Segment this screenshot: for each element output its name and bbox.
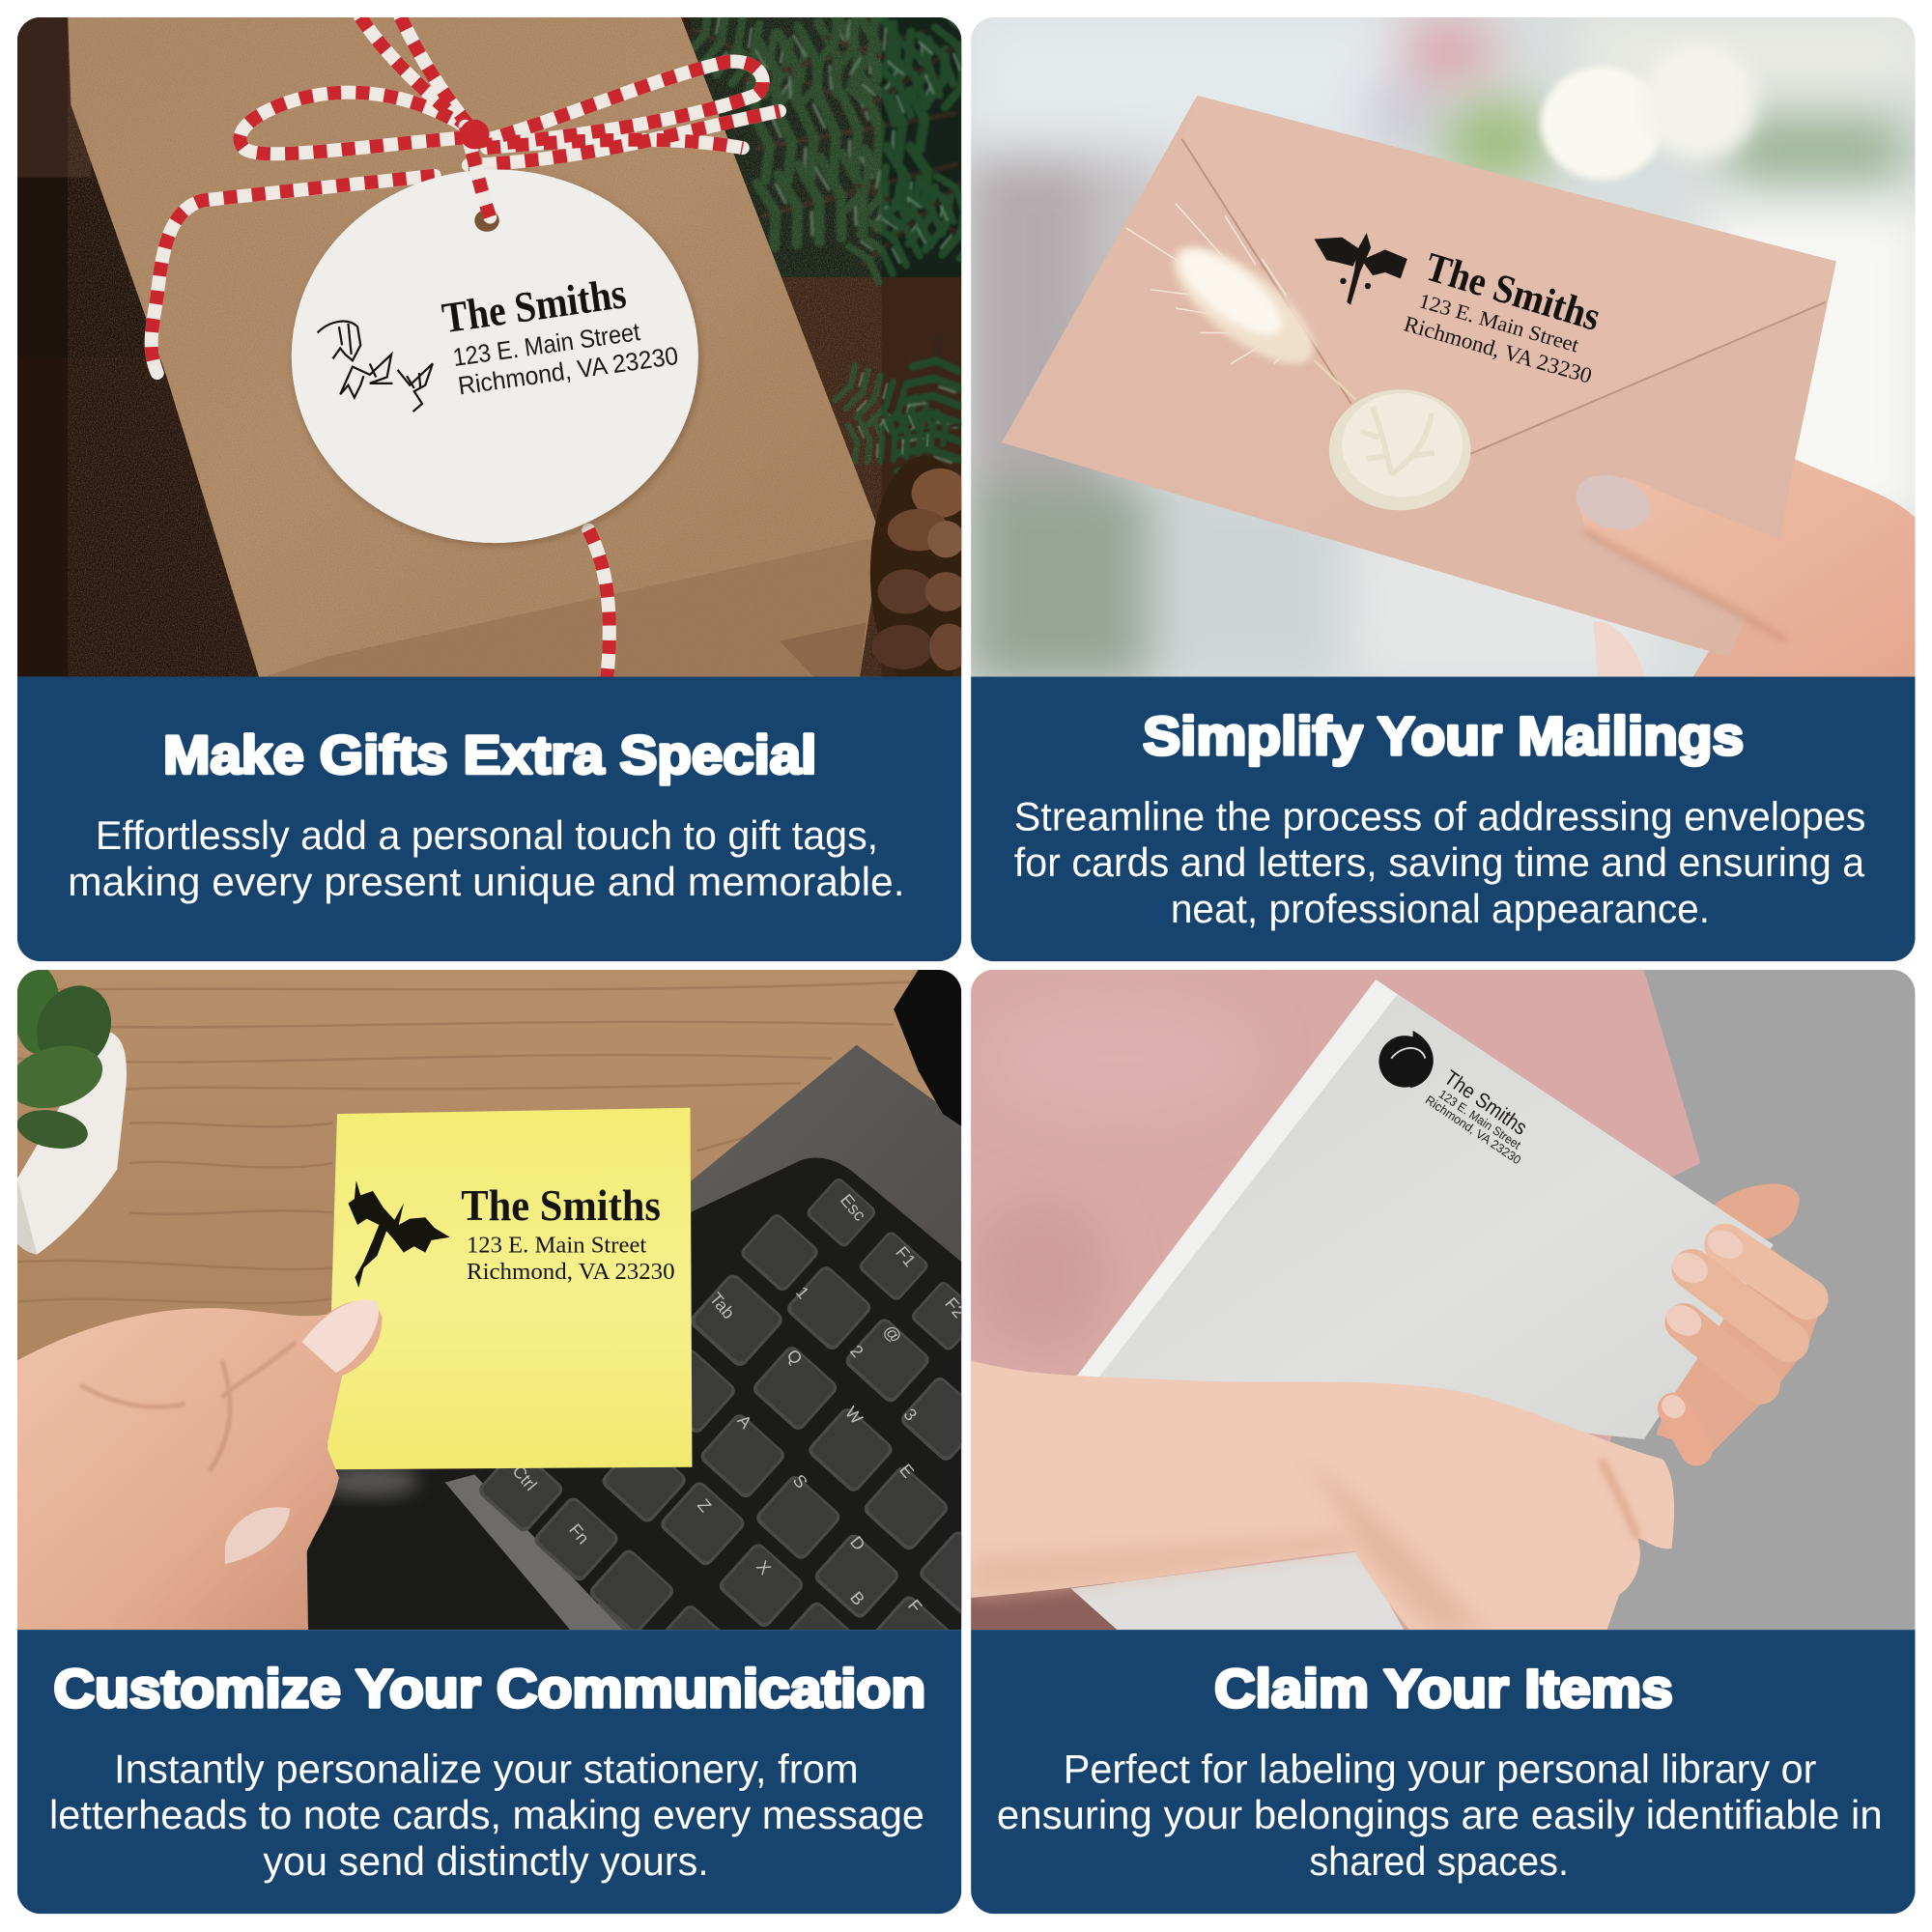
black object corner bbox=[894, 970, 961, 1126]
sticky note bbox=[327, 1108, 692, 1469]
box bbox=[68, 17, 881, 677]
caption: make gifts: Effortlessly add a personal touch to gift tags, bbox=[96, 812, 878, 858]
envelope bbox=[1002, 96, 1836, 657]
stamp dragon bbox=[1314, 233, 1407, 305]
envelope text: The Smiths bbox=[1420, 244, 1605, 340]
key labels: Esc bbox=[837, 1190, 869, 1225]
caption: claim: ensuring your belongings are easily identifiable in bbox=[997, 1792, 1883, 1837]
thumb bbox=[1577, 459, 1916, 677]
key labels bbox=[508, 1190, 969, 1616]
tag shadow bbox=[293, 173, 700, 546]
panel: make gifts extra special bbox=[17, 0, 1011, 961]
caption: claim: Claim Your Items bbox=[1214, 1659, 1673, 1719]
caption: make gifts: making every present unique and memorable. bbox=[68, 859, 905, 904]
photo: sticky note on laptop bbox=[17, 970, 962, 1631]
note text: Richmond, VA 23230 bbox=[467, 1259, 675, 1285]
caption: simplify: Simplify Your Mailings bbox=[1143, 706, 1744, 766]
caption: customize: Customize Your Communication bbox=[54, 1659, 925, 1719]
hand back bbox=[1693, 459, 1916, 677]
caption: customize: you send distinctly yours. bbox=[263, 1838, 709, 1884]
key labels: Fn bbox=[565, 1520, 593, 1548]
note text: 123 E. Main Street bbox=[467, 1233, 647, 1259]
key labels: 3 bbox=[900, 1405, 921, 1425]
pink shirt bbox=[971, 970, 1700, 1630]
caption: customize: letterheads to note cards, making every message bbox=[49, 1792, 924, 1837]
panel: simplify your mailings bbox=[966, 13, 1927, 961]
caption: simplify bbox=[971, 677, 1916, 961]
key labels: S bbox=[789, 1470, 811, 1492]
caption: customize: Instantly personalize your stationery, from bbox=[114, 1746, 859, 1791]
key labels: E bbox=[895, 1461, 918, 1482]
plant and pot bbox=[1, 965, 127, 1255]
key labels: F1 bbox=[892, 1242, 920, 1270]
pine cone bbox=[869, 456, 962, 676]
key labels: Tab bbox=[706, 1289, 739, 1322]
key labels: @ bbox=[880, 1321, 906, 1347]
keys bbox=[476, 1176, 1007, 1691]
book text: The Smiths bbox=[1440, 1065, 1532, 1140]
tag dragons bbox=[318, 322, 433, 412]
fingers bbox=[1657, 1225, 1807, 1450]
caption: claim: Perfect for labeling your personal library or bbox=[1064, 1746, 1816, 1791]
caption: customize bbox=[17, 1630, 961, 1914]
wax seal bbox=[1329, 389, 1471, 510]
tag text: Richmond, VA 23230 bbox=[456, 341, 680, 401]
photo: gift box with round tag bbox=[17, 0, 1011, 691]
feather bbox=[1126, 204, 1355, 399]
twine bbox=[152, 17, 780, 678]
caption: simplify: for cards and letters, saving time and ensuring a bbox=[1014, 839, 1865, 885]
photo: hands holding book bbox=[971, 970, 1916, 1630]
caption: make gifts: Make Gifts Extra Special bbox=[163, 725, 816, 785]
photo: hands holding book: Richmond, VA 23230 bbox=[1423, 1093, 1524, 1167]
key labels: Z bbox=[694, 1495, 715, 1516]
panel: customize your communication bbox=[1, 965, 1007, 1914]
key labels: X bbox=[753, 1557, 775, 1578]
caption: make gifts bbox=[17, 677, 961, 961]
note text bbox=[461, 1180, 675, 1285]
tag text: 123 E. Main Street bbox=[451, 317, 642, 372]
key labels: F2 bbox=[941, 1293, 969, 1321]
photo: hands holding book: 123 E. Main Street bbox=[1436, 1087, 1524, 1152]
fingers behind envelope bbox=[1593, 621, 1644, 677]
note dragon bbox=[348, 1180, 450, 1288]
key labels: D bbox=[846, 1532, 869, 1554]
arm and hand bbox=[971, 1360, 1674, 1630]
key labels: B bbox=[846, 1588, 868, 1609]
caption: claim: shared spaces. bbox=[1309, 1838, 1569, 1884]
tag text: The Smiths bbox=[440, 269, 629, 342]
laptop body bbox=[443, 1045, 961, 1630]
key labels: Q bbox=[782, 1346, 807, 1369]
key labels: 2 bbox=[846, 1341, 867, 1361]
keyboard well bbox=[469, 1157, 961, 1630]
tag text bbox=[440, 281, 678, 394]
palm behind fingers bbox=[1657, 1184, 1826, 1453]
key labels: F bbox=[904, 1596, 925, 1616]
panel: claim your items bbox=[971, 970, 1916, 1914]
key labels: W bbox=[841, 1403, 867, 1428]
photo: envelope with wax seal: Richmond, VA 23230 bbox=[1402, 311, 1595, 388]
caption: simplify: neat, professional appearance. bbox=[1171, 886, 1710, 931]
photo: envelope with wax seal bbox=[966, 13, 1927, 684]
key labels: A bbox=[733, 1411, 755, 1433]
photo: envelope with wax seal: 123 E. Main Street bbox=[1416, 289, 1581, 356]
book stamp logo bbox=[1378, 1031, 1434, 1088]
caption: claim bbox=[971, 1630, 1916, 1914]
round tag bbox=[292, 169, 698, 543]
key labels: 1 bbox=[792, 1283, 813, 1302]
caption: simplify: Streamline the process of addressing envelopes bbox=[1014, 793, 1865, 838]
hand bbox=[17, 1300, 383, 1630]
note text: The Smiths bbox=[461, 1180, 661, 1230]
book bbox=[1076, 980, 1774, 1439]
key labels: Ctrl bbox=[508, 1462, 541, 1494]
